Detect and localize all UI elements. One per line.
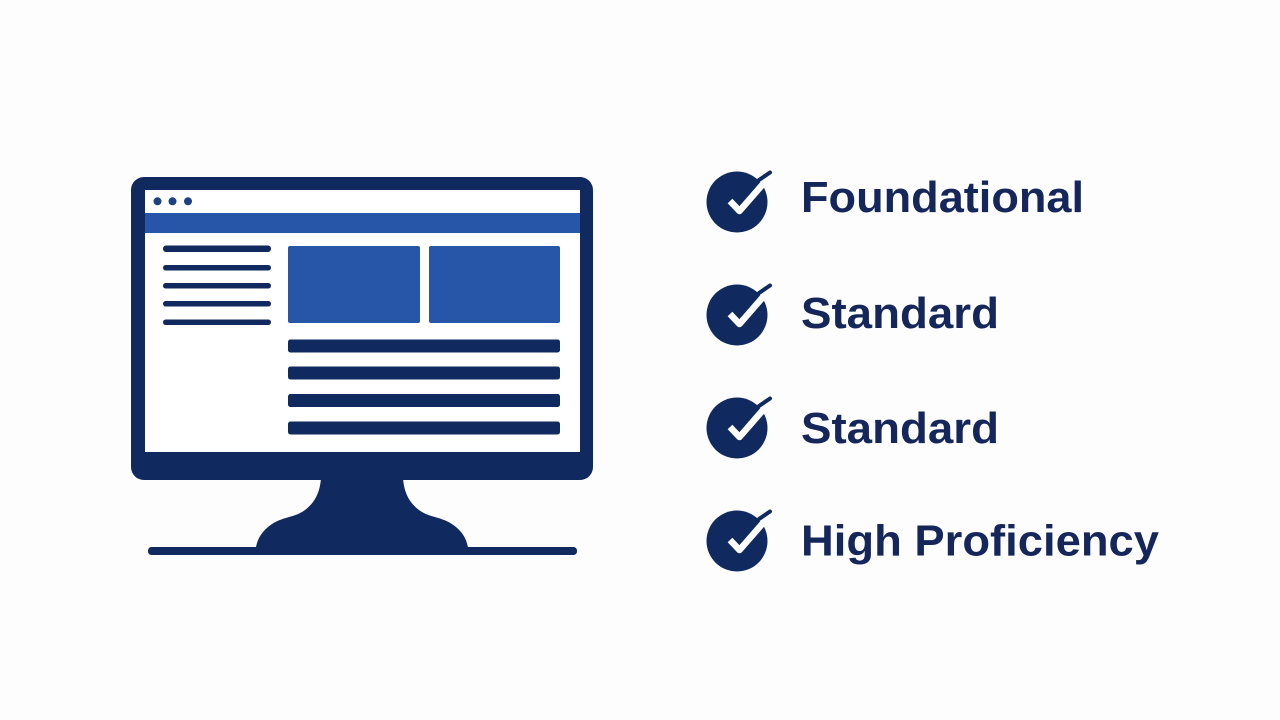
list item: High Proficiency xyxy=(706,510,1160,572)
blue content card right xyxy=(429,246,560,323)
main content text lines xyxy=(288,340,560,434)
label: Standard xyxy=(801,404,999,453)
icon: desktop monitor xyxy=(131,177,593,555)
label: Foundational xyxy=(801,173,1084,222)
label: High Proficiency xyxy=(801,516,1160,566)
browser window dots xyxy=(154,197,192,205)
browser blue title bar xyxy=(145,213,580,233)
icon: check badge xyxy=(706,172,770,232)
blue content card left xyxy=(288,246,420,323)
monitor stand xyxy=(255,478,469,555)
monitor base foot line xyxy=(148,547,577,555)
list item: Standard xyxy=(706,398,999,458)
monitor bezel xyxy=(131,177,593,480)
list item: Standard xyxy=(706,284,999,346)
sidebar text lines xyxy=(163,246,271,325)
icon: check badge xyxy=(706,284,770,346)
label: Standard xyxy=(801,289,999,338)
monitor screen xyxy=(145,190,580,452)
icon: check badge xyxy=(706,398,770,458)
icon: check badge xyxy=(706,510,770,572)
list item: Foundational xyxy=(706,172,1084,232)
